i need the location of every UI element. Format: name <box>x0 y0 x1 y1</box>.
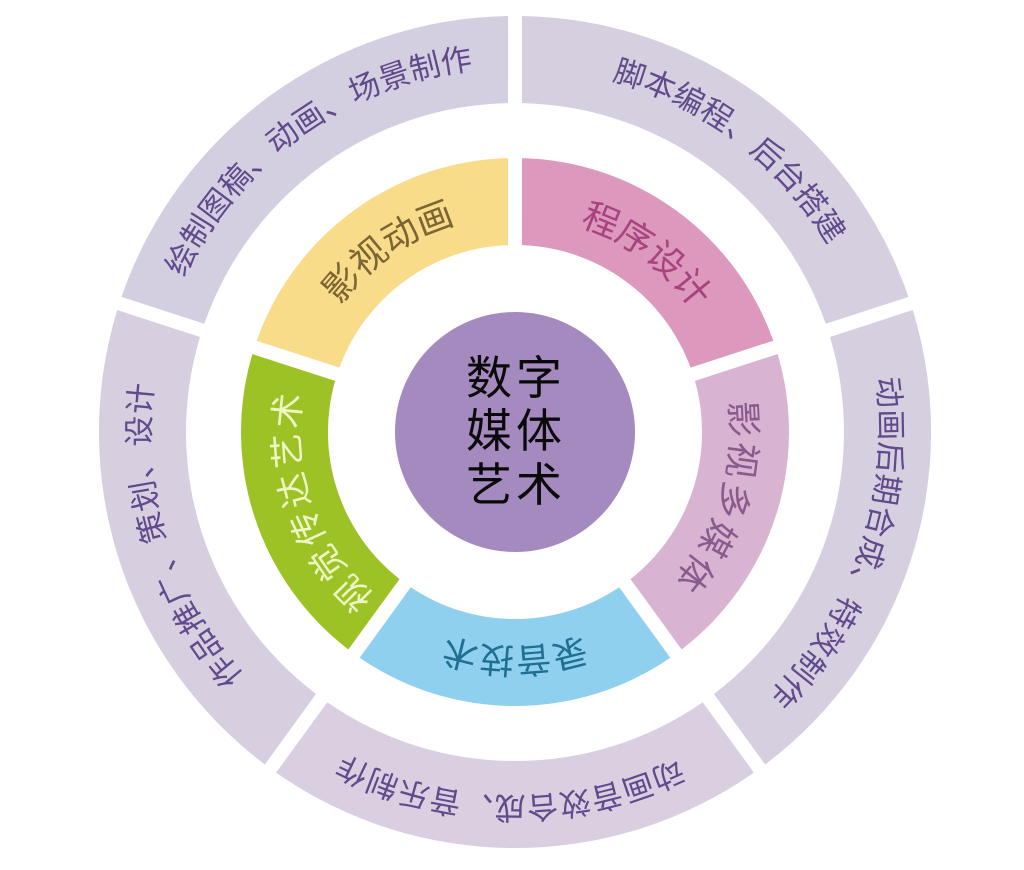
segment: audio technology: 录音技术 <box>444 637 586 678</box>
center circle with title: 体 <box>516 405 562 457</box>
segment: sound and music <box>276 702 754 848</box>
segment: scripting and backend: 脚本编程、后台搭建 <box>612 56 846 244</box>
segment: drawing and animation: 绘制图稿、动画、场景制作 <box>164 46 471 276</box>
panel: inner ring of specialties <box>241 158 789 706</box>
center circle with title: 字 <box>516 352 562 404</box>
segment: film animation <box>256 158 508 368</box>
segment: film multimedia: 影视多媒体 <box>678 402 761 592</box>
segment: compositing and effects: 动画后期合成、特效制作 <box>774 378 904 708</box>
segment: visual communication <box>241 354 400 650</box>
center circle with title: 数 <box>466 352 512 404</box>
center circle with title: 媒 <box>466 405 512 457</box>
segment: programming: 程序设计 <box>583 200 710 303</box>
segment: sound and music: 动画音效合成、音乐制作 <box>336 757 685 823</box>
segment: film multimedia <box>630 354 789 650</box>
segment: promotion and planning <box>99 310 316 764</box>
segment: film animation: 影视动画 <box>320 198 454 304</box>
center circle with title: 艺 <box>466 459 512 511</box>
segment: compositing and effects <box>714 310 931 764</box>
segment: scripting and backend <box>522 16 908 324</box>
segment: promotion and planning: 作品推广、策划、设计 <box>124 384 242 686</box>
segment: drawing and animation <box>122 16 508 324</box>
segment: visual communication: 视觉传达艺术 <box>270 395 372 614</box>
segment: audio technology <box>360 587 670 706</box>
center circle with title: 术 <box>516 459 562 511</box>
center circle with title <box>395 312 635 552</box>
segment: programming <box>522 158 774 368</box>
